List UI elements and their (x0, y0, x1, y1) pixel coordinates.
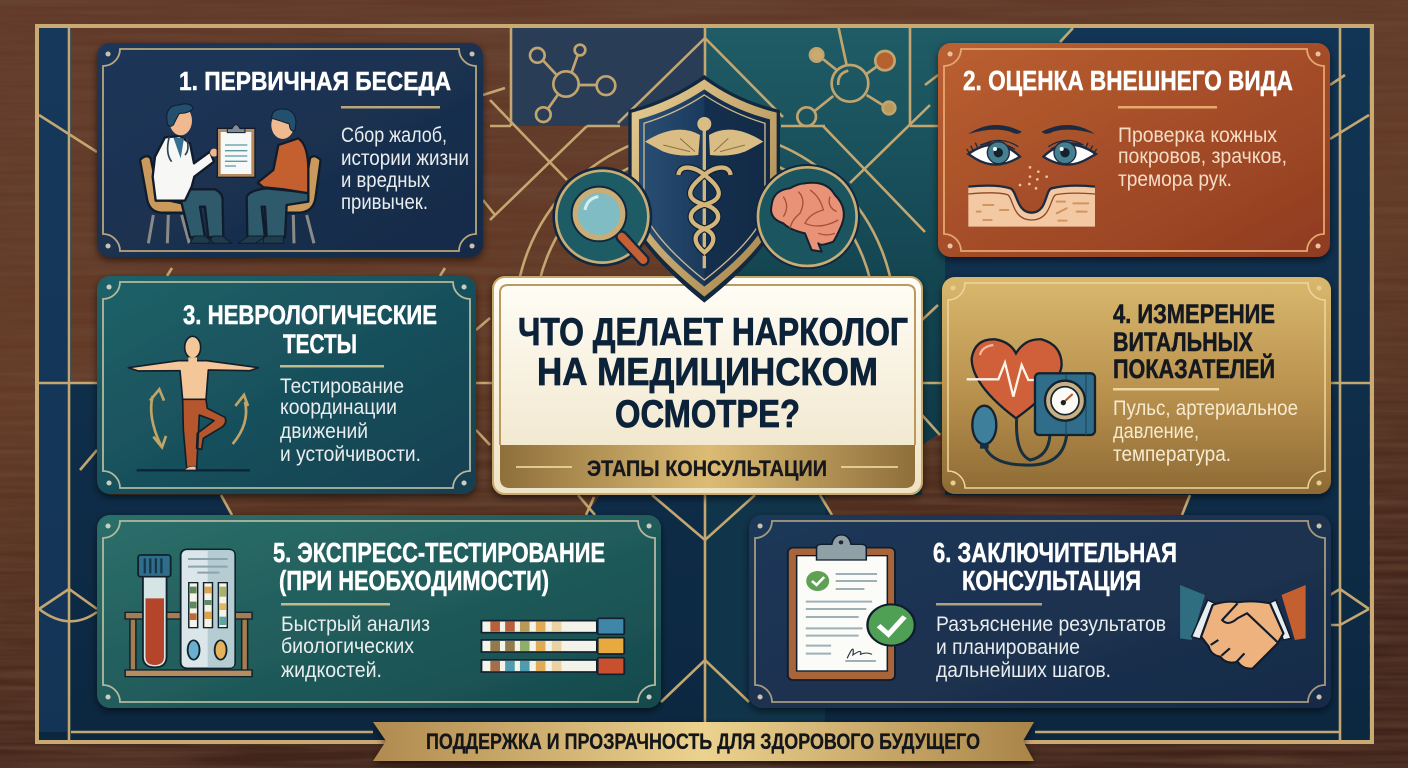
heading: card 3 title: ТЕСТЫ (283, 329, 357, 359)
text: card 4 body (1113, 388, 1298, 466)
heading: card 6 title: КОНСУЛЬТАЦИЯ (962, 565, 1141, 596)
title: ЧТО ДЕЛАЕТ НАРКОЛОГ (518, 311, 908, 354)
icon: heart and tonometer (967, 339, 1095, 465)
text: card 3 body: координации (280, 396, 397, 419)
icon: test tube and cassette (125, 549, 252, 677)
heading: card 5 title (273, 537, 605, 596)
text: card 4 body: Пульс, артериальное (1113, 397, 1298, 420)
panel: card 3 (97, 276, 476, 494)
icon: eyes and skin (967, 125, 1097, 227)
text: card 1 body: истории жизни (341, 147, 469, 170)
text: card 6 body: Разъяснение результатов (936, 613, 1166, 636)
panel: card 6 (749, 515, 1331, 708)
text: card 2 body: тремора рук. (1118, 168, 1232, 191)
icon: shield with caduceus (628, 75, 780, 303)
icon: balance test figure (128, 336, 258, 470)
icon: magnifying glass medallion (552, 167, 652, 267)
icon: molecule left (530, 45, 615, 122)
text: card 1 body (341, 106, 469, 214)
icon: brain medallion (755, 164, 860, 269)
text: card 3 body: и устойчивости. (280, 443, 421, 466)
text: card 3 body: движений (280, 420, 368, 443)
heading: card 5 title: (ПРИ НЕОБХОДИМОСТИ) (279, 565, 549, 596)
text: card 6 body: и планирование (936, 636, 1080, 659)
icon: clipboard with check (788, 535, 915, 680)
heading: card 4 title (1113, 299, 1275, 384)
panel: central title plate (493, 277, 922, 494)
band: subtitle bar: ЭТАПЫ КОНСУЛЬТАЦИИ (587, 456, 827, 481)
text: card 3 body (280, 365, 421, 466)
text: card 3 body: Тестирование (280, 375, 404, 398)
heading: card 1 title: 1. ПЕРВИЧНАЯ БЕСЕДА (179, 68, 451, 96)
title (518, 311, 908, 436)
panel: card 4 (942, 277, 1331, 494)
panel: card 5 (97, 515, 661, 708)
text: card 2 body: Проверка кожных (1118, 124, 1277, 147)
title: НА МЕДИЦИНСКОМ (537, 351, 878, 394)
text: card 4 body: давление, (1113, 420, 1199, 443)
footer ribbon: ПОДДЕРЖКА И ПРОЗРАЧНОСТЬ ДЛЯ ЗДОРОВОГО БУДУЩЕГО (426, 729, 980, 754)
text: card 1 body: Сбор жалоб, (341, 124, 447, 147)
heading: card 4 title: ПОКАЗАТЕЛЕЙ (1113, 353, 1275, 384)
text: card 4 body: температура. (1113, 443, 1231, 466)
text: card 2 body (1118, 106, 1287, 191)
heading: card 6 title: 6. ЗАКЛЮЧИТЕЛЬНАЯ (933, 537, 1177, 568)
panel: card 1 (97, 43, 483, 257)
text: card 5 body: Быстрый анализ (281, 613, 430, 636)
heading: card 4 title: ВИТАЛЬНЫХ (1113, 327, 1253, 357)
text: card 6 body: дальнейших шагов. (936, 659, 1111, 682)
heading: card 3 title: 3. НЕВРОЛОГИЧЕСКИЕ (183, 300, 437, 330)
title: ОСМОТРЕ? (615, 393, 800, 436)
heading: card 5 title: 5. ЭКСПРЕСС-ТЕСТИРОВАНИЕ (273, 537, 605, 568)
band: subtitle bar (500, 445, 915, 488)
icon: molecule right (797, 27, 895, 126)
heading: card 2 title: 2. ОЦЕНКА ВНЕШНЕГО ВИДА (963, 65, 1293, 96)
panel: card 2 (938, 43, 1330, 257)
icon: doctor and patient (140, 104, 321, 243)
icon: test strips (481, 618, 624, 674)
heading: card 6 title (933, 537, 1177, 596)
text: card 1 body: и вредных (341, 169, 430, 192)
text: card 5 body (281, 603, 430, 682)
heading: card 3 title (183, 300, 437, 359)
heading: card 4 title: 4. ИЗМЕРЕНИЕ (1113, 299, 1275, 329)
footer ribbon (373, 722, 1034, 761)
text: card 5 body: жидкостей. (281, 659, 382, 682)
text: card 6 body (936, 603, 1166, 682)
text: card 2 body: покровов, зрачков, (1118, 145, 1287, 168)
icon: handshake (1180, 585, 1306, 669)
text: card 5 body: биологических (281, 635, 414, 658)
text: card 1 body: привычек. (341, 191, 428, 214)
